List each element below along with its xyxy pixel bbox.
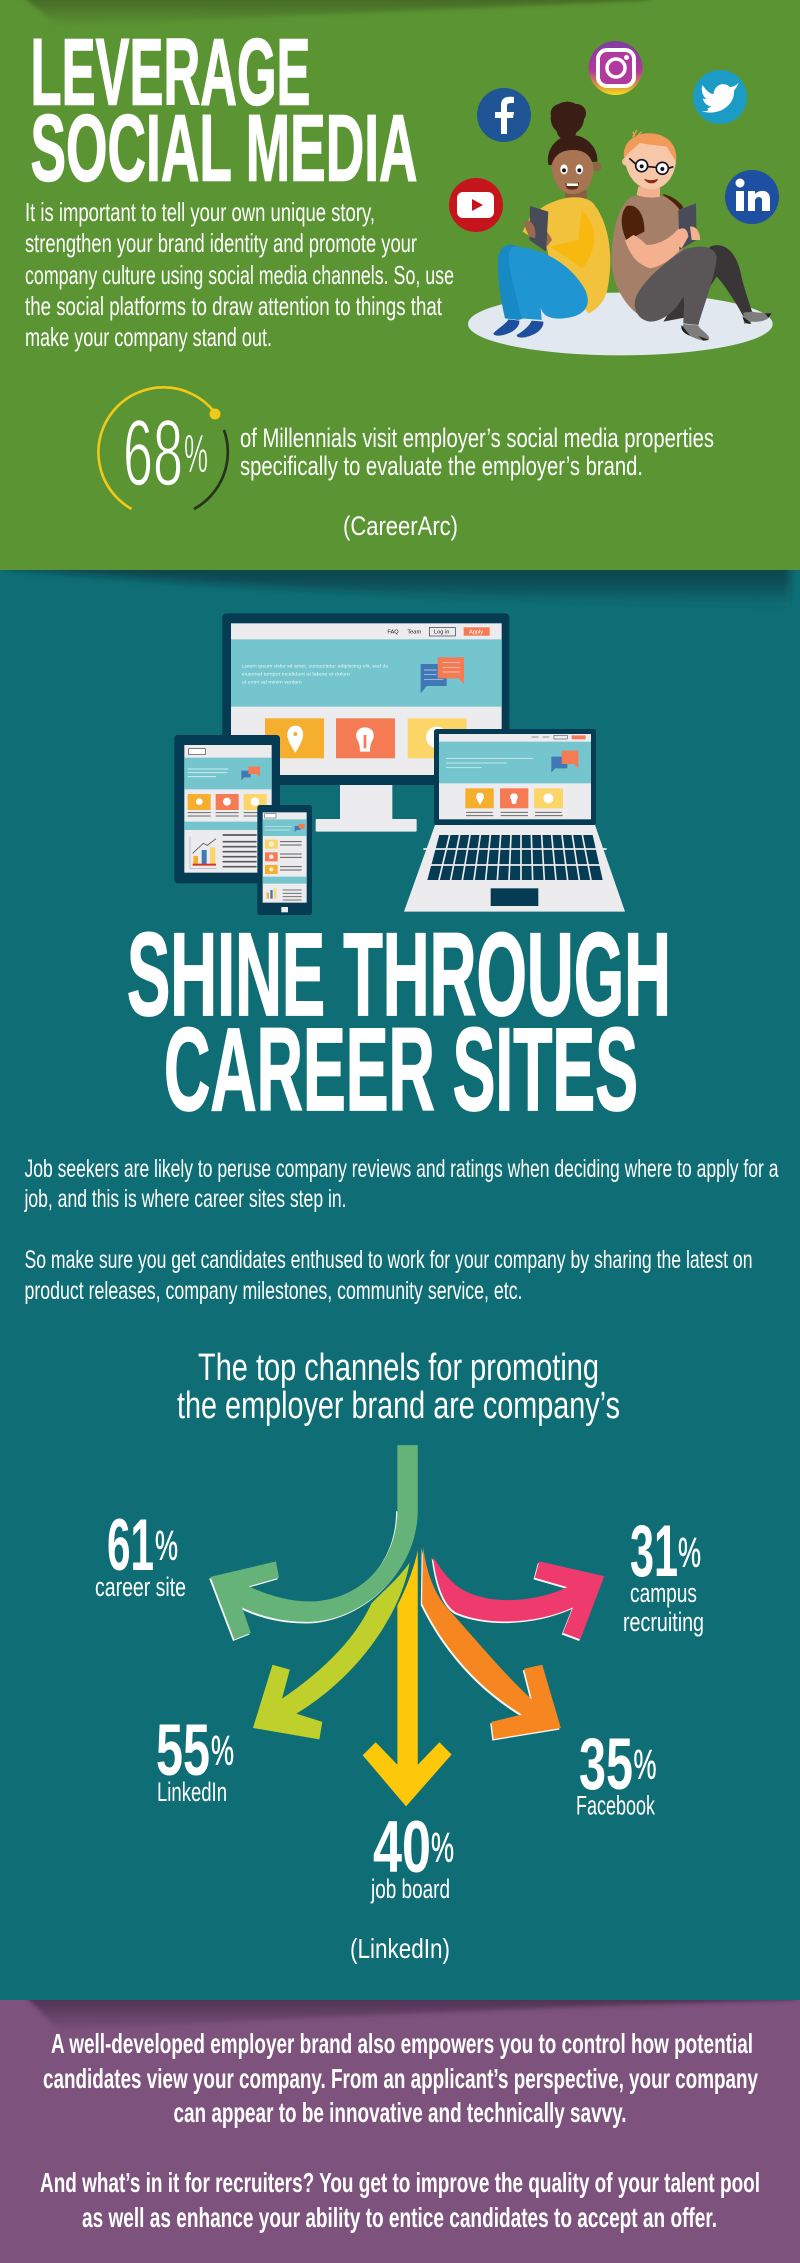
panel: shine through career sites xyxy=(0,560,800,2000)
stat: 55% linkedin: % xyxy=(211,1727,234,1774)
title: leverage social media xyxy=(30,20,417,202)
stat: 31% campus recruiting: recruiting xyxy=(623,1607,704,1637)
stat: 40% job board: job board xyxy=(370,1874,450,1904)
arrow: job board xyxy=(363,1550,452,1806)
title: leverage social media: SOCIAL MEDIA xyxy=(30,96,417,202)
man xyxy=(611,130,772,341)
text block: intro: company culture using social media channels. So, use xyxy=(25,260,454,290)
source: careerarc: (CareerArc) xyxy=(343,511,458,541)
text block: career sites description: job, and this is where career sites step in. xyxy=(24,1185,347,1213)
monitor: Log in xyxy=(434,629,449,635)
monitor: Lorem ipsum dolor sit amet, consectetur adipiscing elit, sed do xyxy=(242,663,389,668)
stat: 40% job board: 40 xyxy=(373,1807,431,1888)
stat: 31% campus recruiting: 31 xyxy=(630,1511,678,1592)
stat: 31% campus recruiting: campus xyxy=(630,1578,697,1608)
stat: 68 percent ring: % xyxy=(184,424,208,484)
source: linkedin: (LinkedIn) xyxy=(350,1933,450,1964)
stat: 55% linkedin: 55 xyxy=(156,1710,210,1791)
arrow: facebook xyxy=(421,1546,561,1741)
arrow: career site xyxy=(209,1445,418,1641)
icon: youtube xyxy=(449,178,503,232)
laptop xyxy=(404,729,625,912)
illustration: two people with phones xyxy=(468,102,773,355)
monitor: Apply xyxy=(469,629,483,635)
arrow: linkedin xyxy=(253,1563,410,1739)
stat: 35% facebook: % xyxy=(634,1741,656,1788)
heading: top channels: The top channels for promoting xyxy=(198,1347,599,1389)
text block: intro xyxy=(25,197,454,352)
phone xyxy=(257,805,312,915)
tablet xyxy=(174,735,280,883)
monitor xyxy=(222,613,509,832)
panel: leverage social media xyxy=(0,0,800,570)
stat: 31% campus recruiting xyxy=(623,1511,704,1637)
text block: millennials statistic xyxy=(240,423,714,481)
stat: 68 percent ring: 68 xyxy=(123,400,183,505)
icon: instagram xyxy=(588,41,642,95)
stat: 40% job board: % xyxy=(431,1824,454,1871)
heading: shine through career sites xyxy=(127,909,671,1136)
monitor: eiusmod tempor incididunt ut labore et dolore xyxy=(242,671,350,676)
heading: top channels: the employer brand are company’s xyxy=(177,1385,620,1427)
woman xyxy=(493,102,610,338)
panel: employer brand closing text xyxy=(0,1990,800,2263)
icon: twitter xyxy=(693,70,747,124)
chart: channel arrows xyxy=(209,1445,604,1806)
stat: 35% facebook: Facebook xyxy=(576,1790,655,1820)
title: leverage social media: LEVERAGE xyxy=(30,20,310,126)
monitor: Team xyxy=(407,629,421,635)
stat: 31% campus recruiting: % xyxy=(678,1529,701,1576)
text block: intro: make your company stand out. xyxy=(25,322,272,352)
monitor: FAQ xyxy=(387,629,399,635)
text block: intro: strengthen your brand identity and promote your xyxy=(25,228,417,258)
illustration: responsive devices xyxy=(174,613,625,915)
monitor: ut enim ad minim veniam xyxy=(242,679,302,684)
icon: linkedin xyxy=(725,170,779,224)
stat: 61% career site: career site xyxy=(95,1572,186,1602)
stat: 55% linkedin: LinkedIn xyxy=(157,1777,227,1807)
arrow: campus recruiting xyxy=(432,1557,604,1641)
heading: top channels xyxy=(177,1347,620,1427)
text block: intro: the social platforms to draw attention to things that xyxy=(25,291,443,321)
text block: career sites description: product releases, company milestones, community service, etc. xyxy=(24,1277,522,1305)
text block: intro: It is important to tell your own unique story, xyxy=(25,197,375,227)
icon: facebook xyxy=(477,88,531,142)
stat: 61% career site: % xyxy=(155,1522,178,1569)
text block: millennials statistic: specifically to evaluate the employer’s brand. xyxy=(240,451,643,481)
stat: 68 percent ring xyxy=(98,387,228,509)
text block: career sites description xyxy=(24,1155,779,1305)
text block: closing paragraphs xyxy=(40,2028,760,2233)
stat: 35% facebook: 35 xyxy=(579,1724,633,1805)
stat: 61% career site: 61 xyxy=(107,1505,154,1586)
